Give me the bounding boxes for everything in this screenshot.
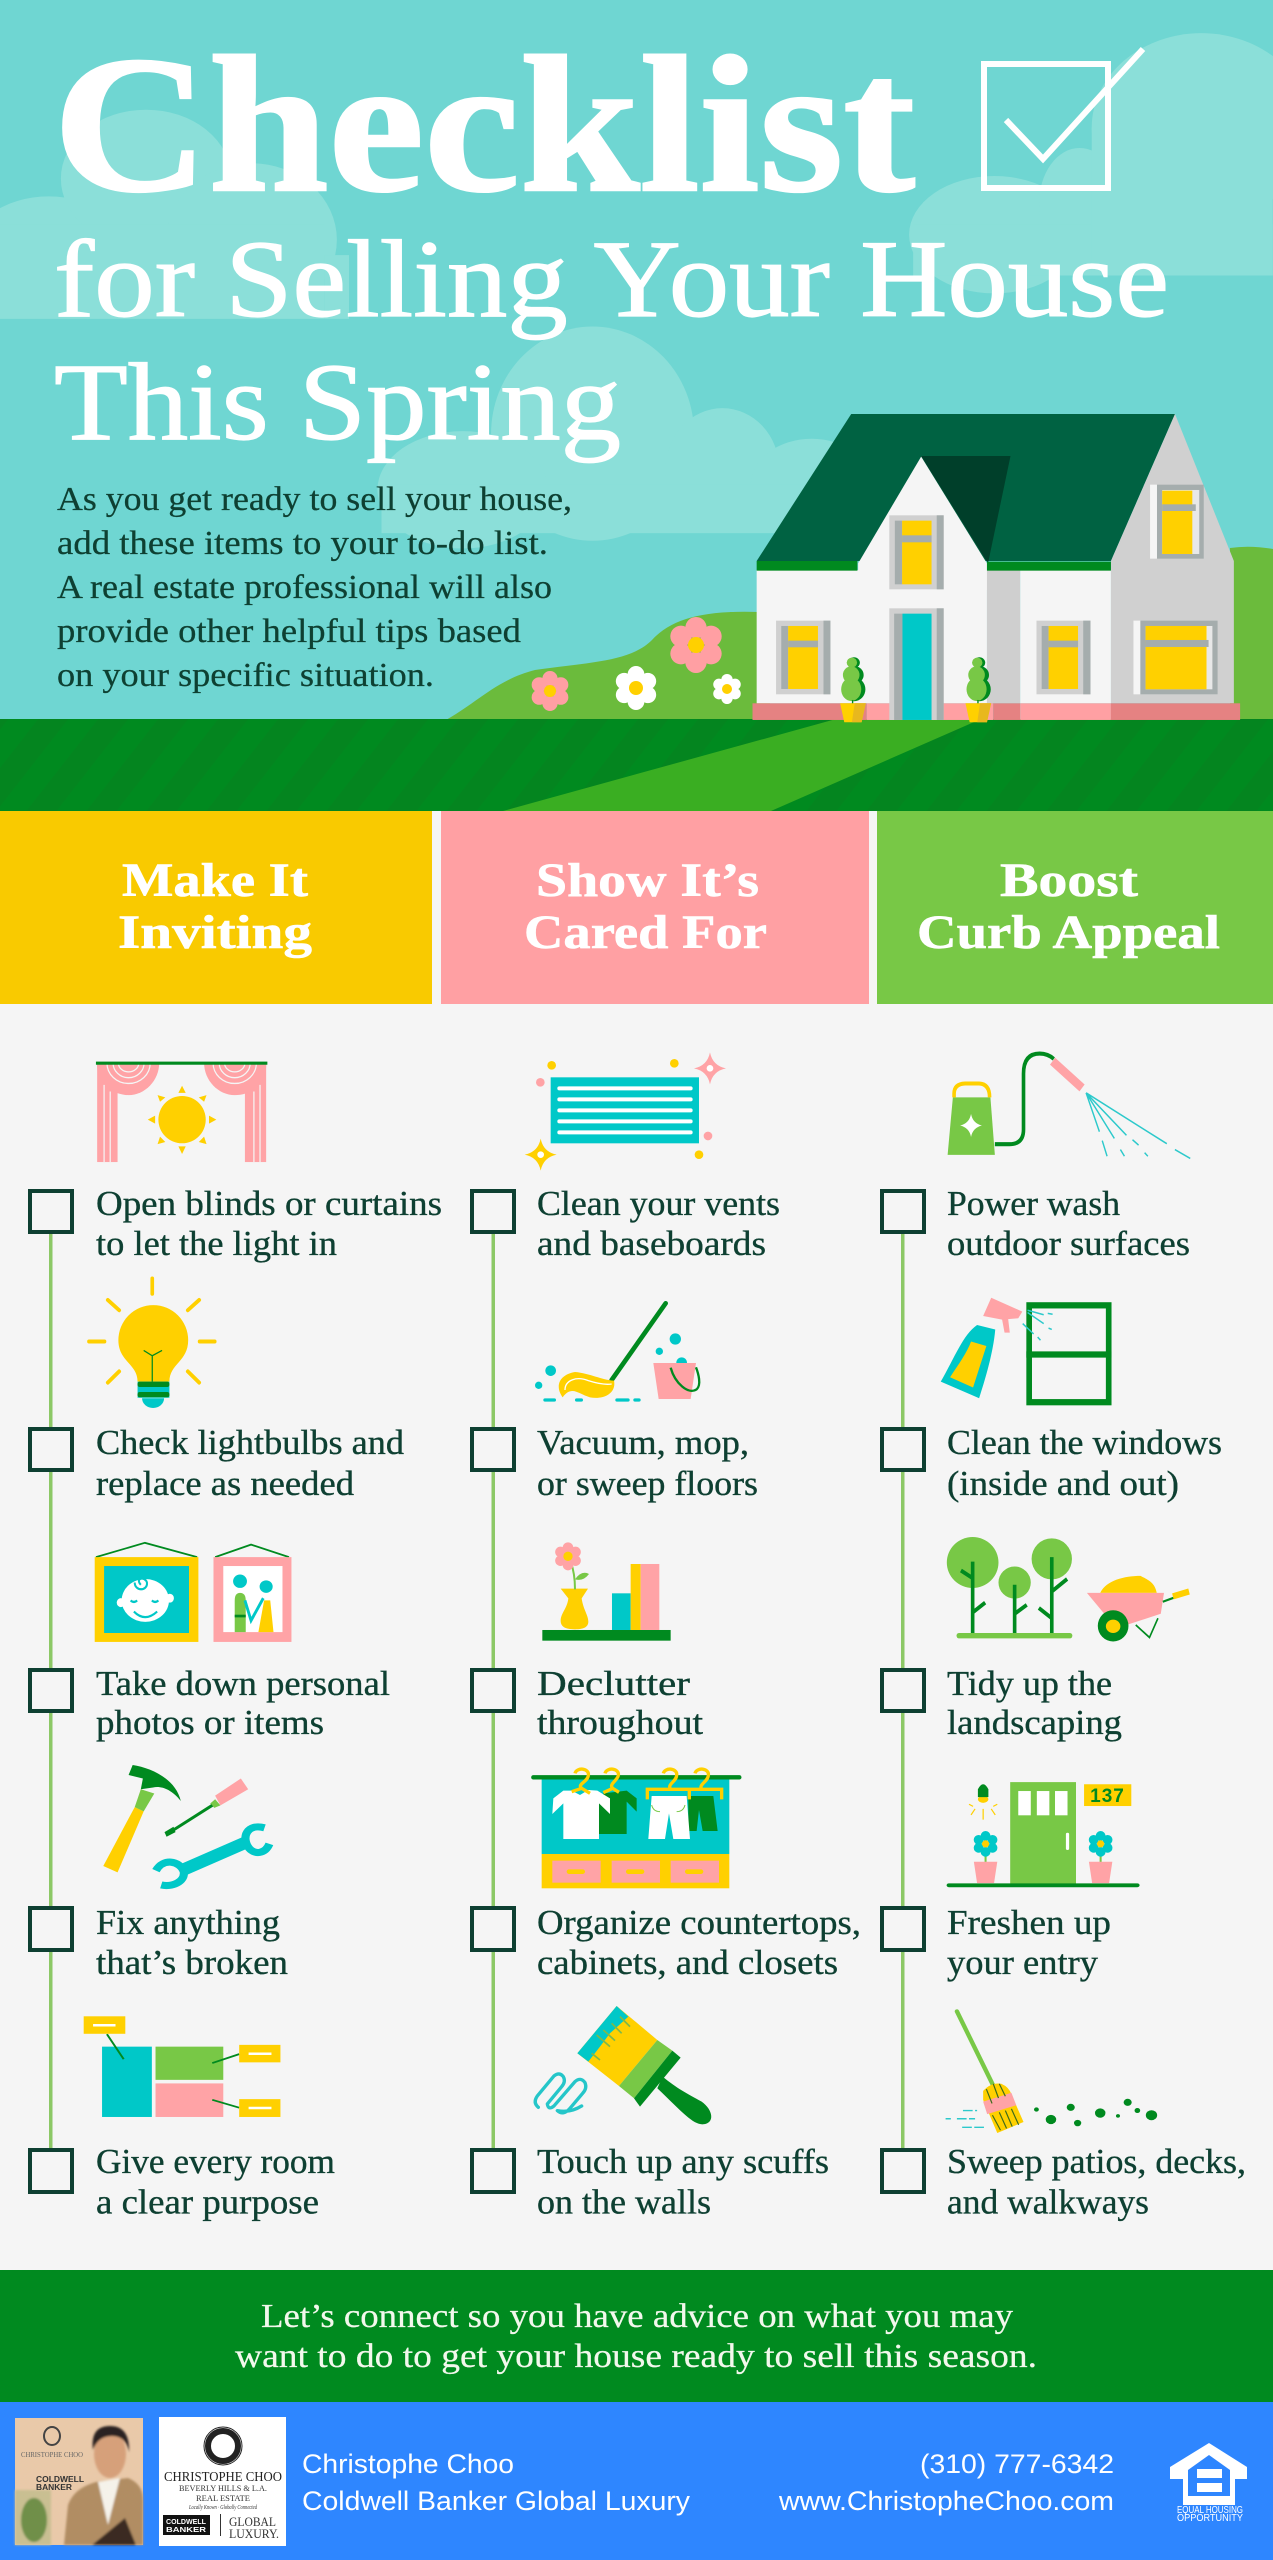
icon: vent with sparkles [525,1052,726,1171]
agent photo: COLDWELL [36,2475,84,2484]
checkbox [30,1429,72,1470]
label: or sweep floors [537,1464,758,1503]
icon: mop and bucket [535,1303,699,1400]
label: outdoor surfaces [947,1224,1190,1263]
contact details: www.ChristopheChoo.com [778,2486,1114,2516]
icon: lightbulb [89,1279,215,1408]
icon: family photos [95,1543,291,1642]
label: Clean your vents [537,1184,780,1223]
checkbox [30,1908,72,1950]
company logo: REAL ESTATE [196,2494,250,2503]
label: Take down personal [96,1664,390,1703]
intro text: on your specific situation. [57,657,434,694]
title: for Selling Your House [54,218,1169,340]
label: that’s broken [96,1943,288,1982]
panel: checklist [0,1004,1273,2270]
label: Touch up any scuffs [537,2142,829,2181]
intro text: add these items to your to-do list. [57,525,548,562]
icon: front door with plants: 137 [1090,1786,1125,1807]
checkbox [472,1908,514,1950]
checkbox [472,2150,514,2192]
label: Give every room [96,2142,335,2181]
title [53,17,1169,463]
panel: call to action banner: want to do to get your house ready to sell this season. [235,2338,1037,2375]
header: show it's cared for: Show It’s [536,854,759,907]
label [537,1903,861,1982]
front door [889,608,944,720]
label [947,2142,1246,2222]
item: touch up scuffs [472,2006,829,2222]
item: check lightbulbs [30,1279,405,1503]
label: landscaping [947,1703,1122,1742]
label: photos or items [96,1703,324,1742]
company logo: Locally Known · Globally Connected [188,2505,258,2511]
flowers [532,617,741,711]
icon: curtains and sun [96,1062,267,1162]
checkbox [472,1670,514,1711]
item: clean windows [882,1298,1222,1503]
label: a clear purpose [96,2182,319,2222]
label [537,1184,780,1263]
label: to let the light in [96,1224,337,1263]
panel: call to action banner: Let’s connect so you have advice on what you may [261,2298,1013,2335]
panel: call to action banner [0,2270,1273,2402]
header: boost curb appeal [877,811,1273,1004]
checkbox [882,2150,924,2192]
company logo: GLOBAL [229,2514,276,2529]
header: boost curb appeal: Boost [1000,854,1138,907]
label [96,1184,442,1263]
hills [442,547,1273,722]
wing upper window [1150,485,1204,559]
icon: equal housing opportunity [1170,2443,1247,2524]
checkbox [882,1191,924,1232]
icon: closet [533,1769,739,1888]
checkbox [472,1191,514,1232]
label: on the walls [537,2182,711,2222]
label: your entry [947,1943,1099,1982]
label: Check lightbulbs and [96,1423,405,1462]
agent name: Christophe Choo [302,2449,514,2479]
intro text: As you get ready to sell your house, [57,481,572,518]
company logo: CHRISTOPHE CHOO [164,2470,282,2485]
icon: pressure washer [948,1054,1190,1158]
label: replace as needed [96,1464,355,1503]
grass with path [0,719,1273,811]
contact details [778,2449,1114,2516]
header: show it's cared for: Cared For [524,906,767,959]
clouds [0,33,1273,548]
item: vacuum mop [472,1303,758,1503]
icon: floor plan with labels [84,2016,280,2117]
icon: spray bottle and window [941,1298,1112,1402]
label: and baseboards [537,1224,766,1263]
checkbox [882,1670,924,1711]
icon: paint brush [535,2006,711,2124]
title: Checklist [53,17,915,233]
header: make it inviting: Inviting [118,906,312,959]
checkbox [882,1908,924,1950]
checkbox [30,1191,72,1232]
house [753,414,1240,722]
label [537,1664,703,1742]
agent photo: CHRISTOPHE CHOO [21,2451,83,2459]
header: make it inviting [0,811,432,1004]
item: power wash [882,1054,1190,1263]
topiary left [840,657,866,722]
item: clean vents [472,1052,780,1263]
label: Power wash [947,1184,1120,1223]
label: Sweep patios, decks, [947,2142,1246,2181]
icon: equal housing opportunity: OPPORTUNITY [1177,2513,1243,2524]
company logo: LUXURY. [229,2526,279,2541]
label: throughout [537,1703,703,1742]
company logo: BANKER [166,2527,206,2534]
checkbox [30,1670,72,1711]
label [96,2142,335,2222]
checkbox [472,1429,514,1470]
label [96,1903,288,1982]
item: tidy landscaping [882,1537,1189,1742]
agent photo: BANKER [36,2483,72,2492]
item: organize [472,1769,861,1982]
label [947,1423,1222,1503]
label: cabinets, and closets [537,1943,838,1982]
label: (inside and out) [947,1464,1179,1503]
label: and walkways [947,2182,1149,2222]
upper gable window [889,515,944,589]
label [947,1903,1111,1982]
icon: front door with plants [949,1782,1137,1885]
label: Vacuum, mop, [537,1423,749,1462]
label [947,1664,1122,1742]
intro text: provide other helpful tips based [57,613,521,650]
icon: equal housing opportunity: EQUAL HOUSING [1177,2505,1243,2516]
label [96,1423,405,1503]
checkbox [30,2150,72,2192]
header: show it's cared for [441,811,869,1004]
header: boost curb appeal: Curb Appeal [917,906,1220,959]
item: freshen entry [882,1782,1137,1982]
middle window [1036,621,1090,694]
wing lower window [1133,621,1218,694]
agent name [302,2449,691,2516]
intro text [57,481,572,694]
agent name: Coldwell Banker Global Luxury [302,2486,691,2516]
label: Open blinds or curtains [96,1184,442,1223]
intro text: A real estate professional will also [57,569,552,606]
item: sweep patios [882,2011,1246,2222]
company logo: BEVERLY HILLS & L.A. [179,2484,267,2493]
header: make it inviting: Make It [122,854,308,907]
label [947,1184,1190,1263]
left window [776,621,830,694]
timeline lines [49,1234,904,2148]
icon: title check box [984,49,1143,188]
label [537,2142,829,2222]
title: This Spring [54,341,621,463]
icon: shelf with vase and books [542,1542,671,1641]
label: Fix anything [96,1903,280,1942]
checkbox [882,1429,924,1470]
item: open blinds [30,1062,442,1263]
icon: trees and wheelbarrow [947,1537,1189,1641]
contact details: (310) 777-6342 [920,2449,1114,2479]
item: fix broken [30,1765,288,1982]
label [537,1423,758,1503]
panel: footer [0,2402,1273,2560]
label: Tidy up the [947,1664,1112,1703]
icon: tools [103,1765,269,1886]
panel: column headers [0,811,1273,1004]
label: Declutter [537,1664,690,1703]
company logo [159,2417,286,2546]
label [96,1664,390,1742]
label: Clean the windows [947,1423,1222,1462]
icon: broom and debris [946,2011,1157,2133]
item: room purpose [30,2016,335,2222]
agent photo [15,2418,143,2545]
item: take down photos [30,1543,390,1742]
label: Freshen up [947,1903,1111,1942]
panel: hero [0,0,1273,811]
label: Organize countertops, [537,1903,861,1942]
item: declutter [472,1542,703,1742]
topiary right [965,657,991,722]
company logo: COLDWELL [166,2519,207,2526]
